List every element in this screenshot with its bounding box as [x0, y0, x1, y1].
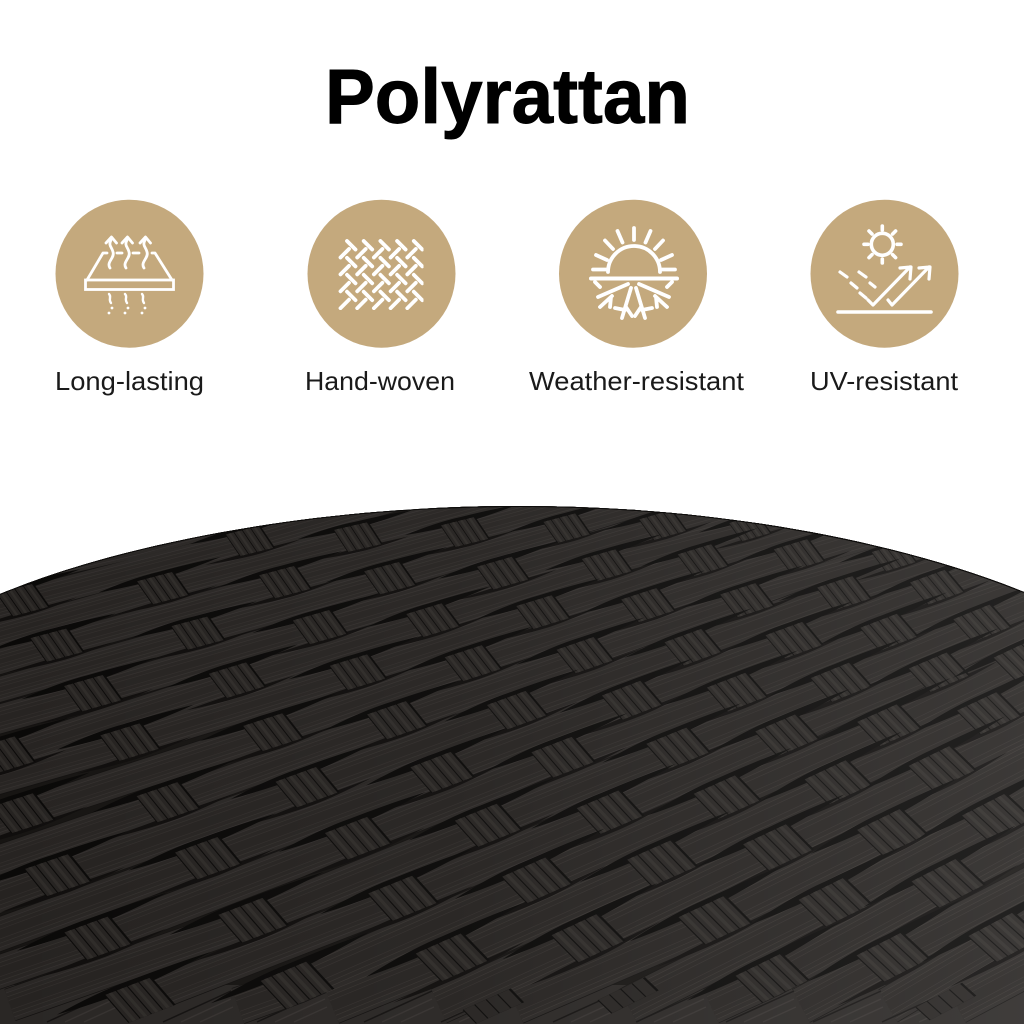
icon: woven pattern	[308, 200, 456, 348]
strand ends along the bottom edge	[47, 991, 952, 1022]
woven strands	[0, 480, 1024, 1006]
label: hand-woven: Hand-woven	[305, 366, 455, 396]
label: weather-resistant: Weather-resistant	[529, 366, 745, 396]
title: Polyrattan	[325, 54, 690, 140]
label: long-lasting: Long-lasting	[55, 366, 204, 396]
cross-strand knots	[0, 494, 1024, 1024]
feature: hand-woven	[305, 200, 456, 396]
icon: sun rays reflected	[810, 200, 958, 348]
feature: weather-resistant	[529, 200, 745, 396]
feature: uv-resistant	[810, 200, 959, 396]
photo: dark woven polyrattan surface	[0, 480, 1024, 1024]
icon: heat and cold slab	[56, 200, 204, 348]
icon: sun and snowflake	[559, 200, 707, 348]
label: uv-resistant: UV-resistant	[810, 366, 959, 396]
feature: long-lasting	[55, 200, 204, 396]
